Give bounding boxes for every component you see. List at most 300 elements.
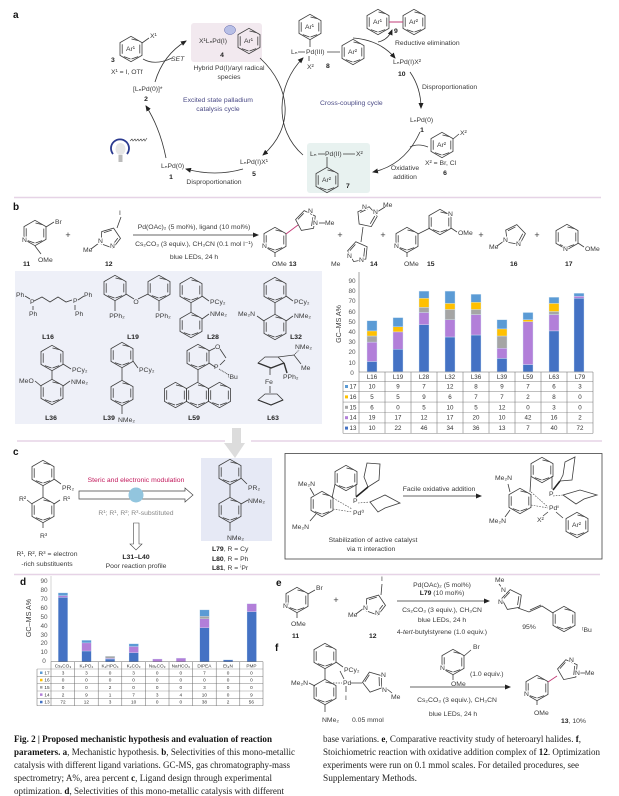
reaction conditions arrow: blue LEDs, 24 h (170, 254, 218, 261)
data table: 9 (500, 384, 504, 390)
biaryl product 9: Reductive elimination (395, 40, 460, 47)
y axis: 50 (348, 319, 356, 326)
data table: 9 (85, 692, 88, 697)
ligand L59: O (215, 344, 220, 351)
compound 3: X¹ = I, OTf (111, 69, 143, 76)
ligand L28 (180, 277, 227, 341)
ligand L63 (258, 344, 312, 422)
conditions arrow: blue LEDs, 24 h (429, 711, 477, 718)
general biaryl scaffold: R³ (40, 533, 48, 540)
product 13 yield: Me (585, 670, 595, 677)
species 4 with aryl radical: species (217, 74, 241, 81)
conditions arrow: N (440, 665, 445, 672)
oxidative addition arrow (373, 132, 428, 181)
Pd(III) complex 8: Lₙ (291, 49, 298, 56)
oxidative addition complex: Me (391, 694, 401, 701)
compound 11: 11 (23, 261, 30, 268)
data table: L36 (471, 374, 482, 381)
y axis: 20 (40, 640, 48, 647)
complex 7: 7 (346, 183, 350, 190)
arrow: facile oxidative addition: Facile oxidative addition (403, 486, 475, 493)
conditions arrow (397, 582, 489, 636)
ligand L39: NMe₂ (118, 417, 135, 424)
compound 11: OMe (291, 621, 306, 628)
y axis: 60 (348, 309, 356, 316)
data table: 7 (526, 425, 530, 432)
compound 3: Ar¹ (126, 46, 136, 53)
data table: 0 (156, 685, 159, 690)
oxidative addition arrow: addition (393, 174, 417, 181)
ligand L28: L28 (207, 334, 219, 341)
byproduct 15: N (394, 243, 399, 250)
conditions arrow: blue LEDs, 24 h (418, 617, 466, 624)
ligand L36: PCy₂ (72, 367, 88, 374)
panel b: ligand screen (13, 202, 600, 433)
conditions arrow: Pd(OAc)₂ (5 mol%) (413, 582, 471, 589)
species 1 right: LₙPd(0) (410, 117, 433, 124)
y axis: 50 (40, 614, 48, 621)
caption left column: catalysis with different ligand variations. GC-MS, gas chromatography-mass (14, 760, 290, 770)
compound 12: Me (83, 247, 93, 254)
species 2 (133, 86, 163, 103)
data table: K₂CO₃ (127, 663, 141, 668)
poor reaction profile note: Poor reaction profile (106, 563, 167, 570)
left catalyst: Pd⁰ (353, 509, 364, 517)
data table: 7 (474, 394, 478, 401)
data table: 0 (85, 678, 88, 683)
complex 7: Ar² (322, 177, 332, 184)
data table: 19 (369, 415, 376, 422)
data table: 0 (578, 404, 582, 411)
compound 12: I (381, 576, 383, 583)
product 13 yield: 13, 10% (561, 718, 586, 725)
data table: 2 (526, 394, 530, 401)
data table: 0 (179, 678, 182, 683)
general biaryl scaffold: R¹ (63, 496, 71, 503)
y axis: 80 (348, 288, 356, 295)
caption right column: base variations. e, Comparative reactivity study of heteroaryl halides. f, (323, 734, 581, 744)
caption left column: Fig. 2 | Proposed mechanistic hypothesis and evaluation of reaction (14, 734, 272, 744)
conditions arrow (410, 644, 510, 718)
box: ligands L79 L80 L81: NMe₂ (248, 498, 265, 505)
species 10 (393, 59, 422, 78)
y axis: 30 (348, 339, 356, 346)
data table: 3 (156, 692, 159, 697)
ligand L59: ᵗBu (228, 374, 238, 381)
ligand L28: NMe₂ (210, 311, 227, 318)
right oxidative complex: II (557, 505, 559, 509)
disproportionation arrow: Disproportionation (422, 84, 477, 91)
right oxidative complex: P (549, 491, 554, 498)
excited state cycle title (183, 97, 253, 113)
byproduct 17 (556, 224, 600, 268)
compound 11 (22, 219, 63, 268)
byproduct 15 (394, 209, 473, 268)
byproduct 14 (331, 202, 393, 268)
Pd(III) complex 8: Ar² (348, 49, 358, 56)
plus: + (333, 595, 339, 605)
ligand name list (212, 546, 249, 572)
byproduct 15: 15 (427, 261, 435, 268)
ligand L16: L16 (42, 334, 54, 341)
data table: L63 (549, 374, 560, 381)
compound 11: Br (316, 585, 324, 592)
data table: NaHCO₃ (172, 663, 190, 668)
species 4 with aryl radical: Hybrid Pd(I)/aryl radical (193, 65, 265, 72)
right oxidative complex: Me₂N (495, 475, 512, 482)
y axis (348, 272, 359, 377)
byproduct 16: N (503, 237, 508, 244)
caption right column: Supplementary Methods. (323, 773, 417, 783)
species 2: 2 (144, 96, 148, 103)
byproduct 16: 16 (510, 261, 518, 268)
species 4 with aryl radical: 4 (220, 52, 224, 59)
data table: PMP (246, 663, 256, 668)
disproportionation arrow (410, 72, 477, 108)
species 1 and 5 with disproportionation: Disproportionation (186, 179, 242, 186)
data table: 3 (85, 670, 88, 675)
oxidative addition complex: PCy₂ (344, 667, 360, 674)
data table: 0 (179, 670, 182, 675)
data table: 0 (203, 678, 206, 683)
data table: 46 (421, 425, 428, 432)
plus: + (534, 230, 540, 240)
compound 12: N (110, 243, 115, 250)
ligand L59 (164, 344, 238, 422)
cross-coupling title: Cross-coupling cycle (320, 100, 383, 107)
y axis: 40 (40, 623, 48, 630)
box: oxidative addition stabilisation (285, 454, 602, 559)
data table: 6 (552, 384, 556, 390)
compound 6: X² (460, 130, 468, 137)
ligand name list: L79, R = Cy (212, 546, 249, 553)
excited cycle arrows (143, 41, 285, 173)
data table: 10 (447, 404, 454, 411)
compound 12: 12 (105, 261, 113, 268)
y axis: 80 (40, 587, 48, 594)
conditions arrow: Cs₂CO₃ (3 equiv.), CH₃CN (417, 697, 497, 704)
data table: 20 (473, 415, 480, 422)
compound 12: 12 (369, 633, 377, 640)
data table: 17 (350, 384, 357, 390)
data table: 9 (396, 384, 400, 390)
y axis: 60 (40, 605, 48, 612)
caption left column (14, 734, 295, 796)
compound 12: Me (348, 612, 358, 619)
complex 7: Lₙ (310, 151, 317, 158)
data table: 7 (500, 394, 504, 401)
label SET: SET (171, 56, 185, 63)
species 1 and 5 with disproportionation: 1 (169, 174, 173, 181)
ligand L28: PCy₂ (210, 299, 226, 306)
data table: 7 (422, 384, 426, 390)
caption left column: parameters. a, Mechanistic hypothesis. b, Selectivities of this mono-metallic (14, 747, 295, 757)
conditions arrow: Cs₂CO₃ (3 equiv.), CH₃CN (402, 607, 482, 614)
compound 11: N (283, 603, 288, 610)
panel: ligands (15, 271, 322, 424)
data table: 3 (109, 700, 112, 705)
poor reaction profile note (106, 554, 167, 570)
data table: 0 (109, 678, 112, 683)
cross-coupling cycle left arc (282, 58, 303, 155)
y axis: 90 (348, 278, 356, 285)
data table: 15 (44, 685, 50, 690)
byproduct 14: Me (383, 202, 393, 209)
data table: L28 (419, 374, 430, 381)
Pd(III) complex 8: X² (307, 64, 315, 71)
y axis (40, 576, 51, 665)
oxidative addition complex: Pd (343, 680, 352, 687)
data table: 0 (156, 700, 159, 705)
data table: 0 (250, 678, 253, 683)
ligand L36: NMe₂ (71, 379, 88, 386)
arrow: large grey down arrow (224, 428, 245, 458)
data table: 8 (552, 394, 556, 401)
biaryl product 9: 9 (394, 28, 398, 35)
panel e: comparative reactivity (276, 576, 592, 640)
data table: 12 (84, 700, 89, 705)
plus: + (380, 230, 386, 240)
y axis: 70 (40, 596, 48, 603)
ligand L32: L32 (290, 334, 302, 341)
panel label e: e (276, 578, 282, 589)
complex 7: X² (356, 151, 364, 158)
data table: 13 (499, 425, 506, 432)
data table: 0 (62, 678, 65, 683)
compound 12: N (98, 238, 103, 245)
data table: 15 (350, 404, 357, 411)
species 10: 10 (398, 71, 406, 78)
data table: 0 (62, 685, 65, 690)
ligand L63: Fe (265, 379, 273, 386)
compound 6: X² = Br, Cl (425, 160, 457, 167)
ligand L63: NMe₂ (295, 344, 312, 351)
product 13: N (262, 243, 267, 250)
oxidative addition complex: N (382, 687, 387, 694)
data table: 5 (474, 404, 478, 411)
species 10: LₙPd(I)X² (393, 59, 422, 66)
product 13 yield (524, 657, 595, 725)
data table: 0 (250, 670, 253, 675)
data table: 0 (132, 685, 135, 690)
general biaryl scaffold: R² (19, 496, 27, 503)
compound 12 (348, 576, 388, 640)
byproduct 15: OMe (404, 261, 419, 268)
product 13 yield: OMe (534, 710, 549, 717)
ligand name list: L80, R = Ph (212, 556, 249, 563)
data table: 5 (370, 394, 374, 401)
caption left column: spectrometry; A%, area percent c, Ligand design through experimental (14, 773, 273, 783)
ligand L16: P (73, 298, 78, 305)
oxidative addition complex: 0.05 mmol (352, 717, 384, 724)
data table: 12 (499, 404, 506, 411)
data table: 56 (249, 700, 254, 705)
plus: + (337, 230, 343, 240)
data table: 0 (132, 678, 135, 683)
data table: Cs₂CO₃ (55, 663, 71, 668)
left catalyst: Me₂N (298, 481, 315, 488)
data table: 16 (350, 394, 357, 401)
data table: Et₃N (223, 663, 233, 668)
data table: 0 (156, 670, 159, 675)
Pd(III) complex 8: Pd(III) (306, 49, 325, 56)
y axis: 0 (350, 370, 354, 377)
product 13 yield: N (524, 691, 529, 698)
data table: 10 (202, 692, 207, 697)
product 13 (262, 208, 335, 268)
general biaryl scaffold (16, 460, 78, 568)
byproduct 14: 14 (370, 261, 378, 268)
species 1 and 5 with disproportionation: 5 (252, 171, 256, 178)
alkene product: Me (495, 577, 505, 584)
data table (37, 662, 263, 706)
compound 3 (111, 33, 158, 76)
ligand L19 (104, 275, 171, 341)
byproduct 17: 17 (565, 261, 573, 268)
compound 11: Br (55, 219, 63, 226)
y axis: 20 (348, 349, 356, 356)
data table: 12 (447, 384, 454, 390)
product 13 yield: N (569, 657, 574, 664)
modulation arrow: R¹; R¹, R²; R³-substituted (98, 510, 174, 517)
y axis: 0 (42, 658, 46, 665)
alkene product: 95% (522, 624, 536, 631)
data table: 4 (179, 692, 182, 697)
data table: 72 (577, 425, 584, 432)
y axis title: GC–MS A% (335, 304, 343, 343)
compound 12: N (375, 610, 380, 617)
data table: 1 (109, 692, 112, 697)
general biaryl scaffold: R¹, R², R³ = electron (16, 551, 78, 558)
ligand L36: MeO (19, 378, 34, 385)
left catalyst: Stabilization of active catalyst (329, 537, 418, 544)
ligand L32 (238, 277, 311, 341)
reaction conditions arrow (133, 224, 258, 261)
data table: 0 (396, 404, 400, 411)
data table: 17 (44, 670, 50, 675)
data table: 0 (227, 685, 230, 690)
box: ligands L79 L80 L81: PR₂ (248, 485, 260, 492)
compound 6 (425, 130, 468, 177)
complex 7 (310, 151, 364, 193)
data table: 12 (421, 415, 428, 422)
byproduct 17: N (563, 246, 568, 253)
alkene product (495, 577, 592, 634)
excited state cycle title: catalysis cycle (196, 106, 240, 113)
light wave (130, 138, 147, 141)
y axis: 10 (348, 360, 356, 367)
alkene product: N (501, 587, 506, 594)
biaryl product 9: Ar² (409, 19, 419, 26)
data table: 2 (227, 700, 230, 705)
Pd(III) complex 8: 8 (326, 63, 330, 70)
alkene product: N (498, 599, 503, 606)
ligand L59: L59 (188, 415, 200, 422)
ligand L63: Me (301, 365, 311, 372)
data table: 3 (552, 404, 556, 411)
data table: 0 (250, 685, 253, 690)
data table: 7 (526, 384, 530, 390)
data table: 10 (499, 415, 506, 422)
data table: 0 (156, 678, 159, 683)
general biaryl scaffold: PR₂ (62, 485, 74, 492)
caption right column: experiments were run on 0.1 mmol scales. For detailed procedures, see (323, 760, 579, 770)
compound 12: I (119, 210, 121, 217)
general biaryl scaffold: -rich substituents (21, 561, 73, 568)
plus: + (65, 230, 71, 240)
arrow: facile oxidative addition (403, 486, 481, 496)
data table: 8 (474, 384, 478, 390)
data table: 13 (350, 425, 357, 432)
box: species 7 (307, 143, 370, 193)
oxidative addition complex (291, 643, 401, 724)
ligand L63: L63 (267, 415, 279, 422)
panel label f: f (275, 643, 279, 654)
data table: Na₂CO₃ (149, 663, 166, 668)
panel label a: a (13, 10, 19, 21)
ligand L16: Ph (84, 292, 93, 299)
data table: 0 (179, 700, 182, 705)
reductive elimination arrow (353, 30, 395, 58)
data table: 7 (203, 670, 206, 675)
data table: K₃PO₄ (80, 663, 93, 668)
data table: 0 (179, 685, 182, 690)
species 1 right (410, 117, 433, 134)
data table: 6 (448, 394, 452, 401)
data table: 9 (250, 692, 253, 697)
down hollow arrow (130, 523, 142, 550)
poor reaction profile note: L31–L40 (122, 554, 150, 561)
box: ligands L79 L80 L81: NMe₂ (227, 535, 244, 542)
modulation arrow (79, 477, 193, 517)
ligand L39: PCy₂ (139, 367, 155, 374)
panel a: mechanistic hypothesis (13, 9, 477, 193)
data table: 5 (422, 404, 426, 411)
data table: 34 (447, 425, 454, 432)
byproduct 14: N (362, 204, 367, 211)
Pd(III) complex 8 (291, 14, 364, 71)
product 13: Me (325, 220, 335, 227)
data table: L59 (523, 374, 534, 381)
species 4 with aryl radical (193, 26, 265, 81)
data table: 3 (62, 670, 65, 675)
ligand L19: L19 (127, 334, 139, 341)
byproduct 17: OMe (585, 246, 600, 253)
compound 12: N (363, 605, 368, 612)
species 2: [LₙPd(0)]* (133, 86, 163, 93)
byproduct 14: N (373, 209, 378, 216)
modulation arrow: Steric and electronic modulation (88, 477, 185, 484)
ligand L19: PPh₂ (155, 313, 171, 320)
data table: 16 (551, 415, 558, 422)
data table: L79 (575, 374, 586, 381)
data table: L32 (445, 374, 456, 381)
data table: 7 (132, 692, 135, 697)
species 1 right: 1 (420, 127, 424, 134)
conditions arrow: Br (473, 644, 481, 651)
product 13: N (313, 220, 318, 227)
byproduct 16: Me (489, 244, 499, 251)
data table: 2 (109, 685, 112, 690)
panel label d: d (20, 577, 26, 588)
ligand L59: P (214, 364, 219, 371)
ligand L16: Ph (16, 292, 25, 299)
data table: 3 (203, 685, 206, 690)
ligand L16: P (30, 299, 35, 306)
data table: 22 (395, 425, 402, 432)
icon: light bulb (111, 139, 129, 162)
ligand L39: L39 (103, 415, 115, 422)
